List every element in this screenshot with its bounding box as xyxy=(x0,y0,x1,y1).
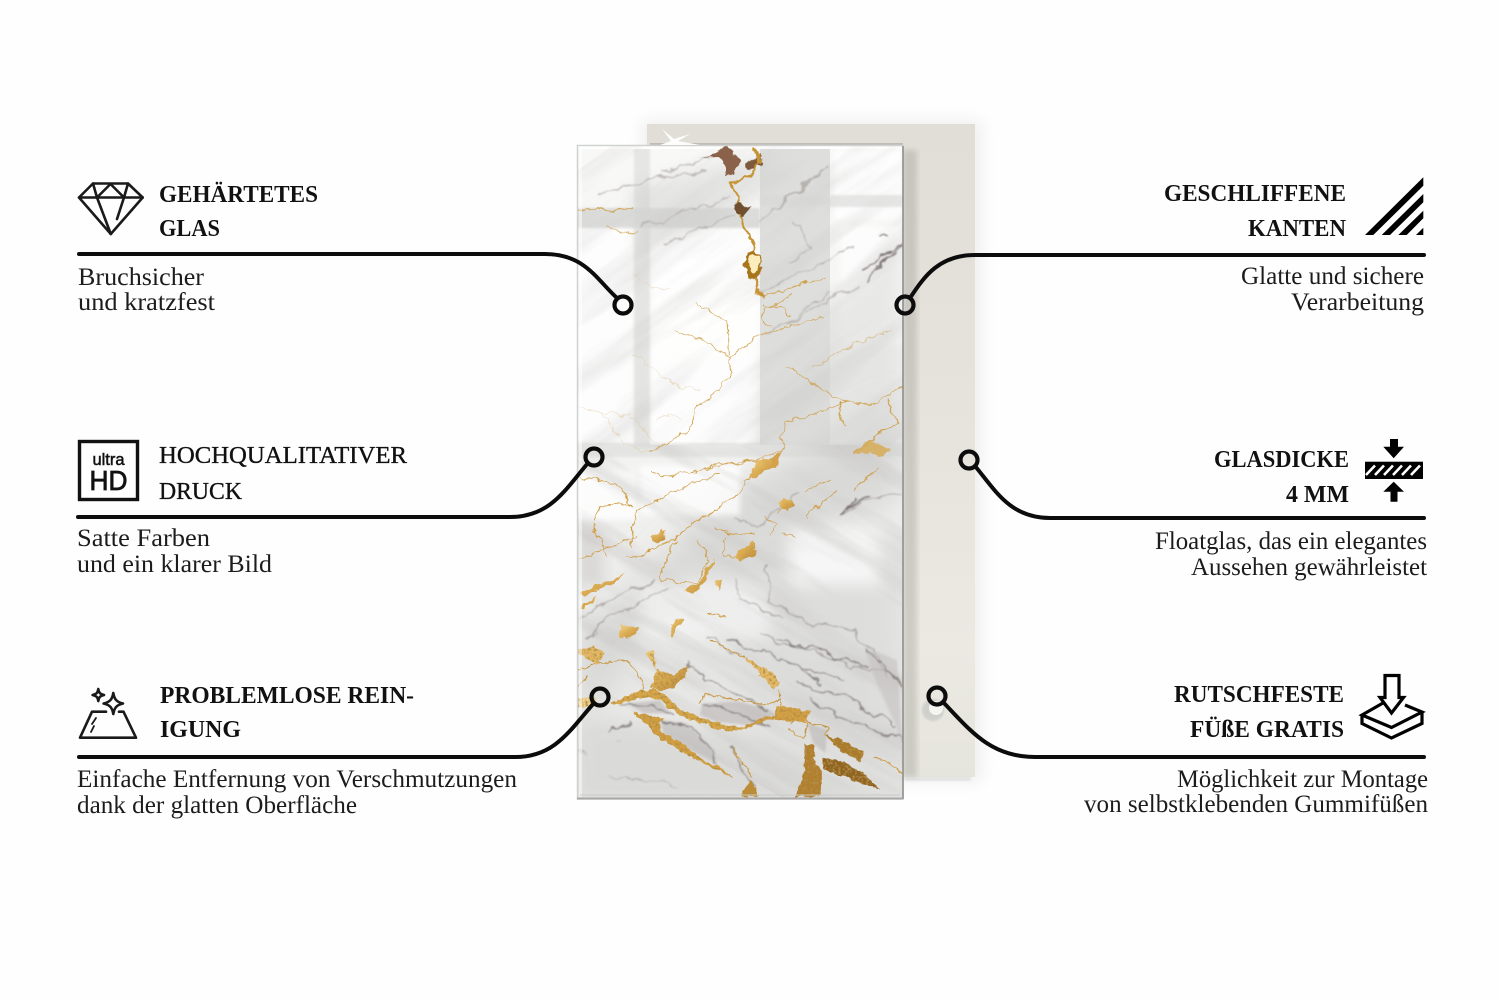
panel: Glasdicke xyxy=(960,439,1427,581)
panel: geschliffene Kanten xyxy=(896,177,1425,316)
description: Möglichkeit zur Montage xyxy=(1177,766,1428,793)
description: Verarbeitung xyxy=(1291,289,1425,316)
heading: GLAS xyxy=(159,216,220,242)
callout line to glass xyxy=(79,688,608,757)
heading xyxy=(159,182,318,242)
marble front glass xyxy=(578,146,902,798)
panel: gehärtetes Glas xyxy=(78,182,632,316)
middle marble veins xyxy=(580,460,900,677)
heading xyxy=(1164,181,1347,242)
infographic canvas xyxy=(76,120,1428,818)
description xyxy=(77,766,517,819)
icon: ultra HD xyxy=(80,442,138,500)
sparkle highlight xyxy=(660,129,700,145)
description: Einfache Entfernung von Verschmutzungen xyxy=(77,766,517,793)
heading xyxy=(1214,447,1349,508)
panel: rutschfeste Füße xyxy=(928,676,1428,818)
icon: ultra HD: HD xyxy=(90,465,128,496)
heading: PROBLEMLOSE REIN- xyxy=(160,683,414,709)
heading: GLASDICKE xyxy=(1214,447,1349,473)
description xyxy=(1155,528,1427,581)
description: Satte Farben xyxy=(77,525,211,552)
grey marble clouds xyxy=(577,160,903,800)
icon: glass thickness xyxy=(1365,439,1423,502)
icon: ground edges xyxy=(1365,177,1423,235)
description: dank der glatten Oberfläche xyxy=(77,792,357,819)
icon: sparkling clean surface xyxy=(80,689,136,738)
description xyxy=(1241,263,1425,316)
callout line to glass xyxy=(960,452,1424,518)
heading: FÜßE GRATIS xyxy=(1190,717,1344,743)
callout line to glass xyxy=(78,448,602,517)
description xyxy=(77,525,273,578)
heading: 4 MM xyxy=(1286,482,1349,508)
description xyxy=(78,264,215,316)
description: Aussehen gewährleistet xyxy=(1191,554,1427,581)
description: Floatglas, das ein elegantes xyxy=(1155,528,1427,555)
description: Glatte und sichere xyxy=(1241,263,1424,290)
upper marble veins xyxy=(577,147,903,470)
panel: hochqualitativer Druck xyxy=(77,442,602,578)
grey pockets xyxy=(627,647,902,763)
heading: HOCHQUALITATIVER xyxy=(159,443,407,469)
callout line to glass xyxy=(79,254,632,314)
heading: DRUCK xyxy=(159,479,243,505)
rubber foot xyxy=(922,699,944,721)
description: Bruchsicher xyxy=(78,264,205,291)
reflections of a window xyxy=(577,145,903,457)
heading: GEHÄRTETES xyxy=(159,182,318,208)
heading xyxy=(160,683,414,743)
description: und ein klarer Bild xyxy=(77,551,273,578)
heading xyxy=(159,443,407,505)
icon: diamond xyxy=(79,184,143,234)
heading: RUTSCHFESTE xyxy=(1174,682,1344,708)
description: von selbstklebenden Gummifüßen xyxy=(1084,791,1428,818)
callout line to glass xyxy=(896,255,1424,314)
product image: marble glass panel xyxy=(512,122,1425,800)
lower marble veins and gold xyxy=(577,640,902,797)
description: und kratzfest xyxy=(78,289,215,316)
callout line to glass xyxy=(928,688,1424,757)
heading xyxy=(1174,682,1344,743)
heading: KANTEN xyxy=(1248,216,1347,242)
description xyxy=(1084,766,1428,818)
back plate with shadow xyxy=(642,120,982,782)
icon: ultra HD: ultra xyxy=(92,451,125,469)
diagonal marble streak texture xyxy=(578,146,902,797)
heading: GESCHLIFFENE xyxy=(1164,181,1346,207)
panel: problemlose Reinigung xyxy=(77,683,608,819)
glass edges xyxy=(577,146,903,799)
icon: adhesive foot on plate xyxy=(1362,676,1422,738)
heading: IGUNG xyxy=(160,717,241,743)
